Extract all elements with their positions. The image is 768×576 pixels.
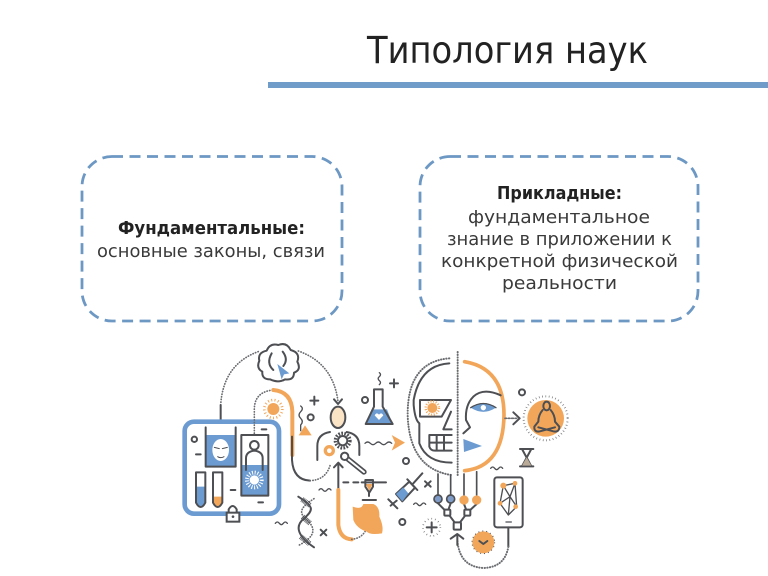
panel: fundamental sciences <box>82 156 342 321</box>
icon: half face <box>463 362 504 471</box>
icon: small marks <box>192 429 266 502</box>
panel text: applied: знание в приложении к <box>447 229 672 250</box>
icon: orange clock <box>472 531 495 554</box>
panel: applied sciences <box>420 156 698 321</box>
panel text: applied: реальности <box>502 273 617 294</box>
icon: squiggle, circle, plus and triangle <box>299 397 318 435</box>
title: Типология наук <box>366 29 648 72</box>
icon: person with gears and wrench <box>317 407 364 472</box>
icon: small waves and cross <box>275 489 331 535</box>
divider: centre dotted line <box>455 352 461 477</box>
icon: brain with cursor <box>258 344 299 381</box>
icon: DNA helix <box>298 497 314 547</box>
panel text: applied <box>441 207 678 294</box>
icon: padlock <box>227 506 239 522</box>
arrow: dotted arc from tank to brain to head <box>221 351 342 430</box>
icon: syringe <box>388 473 422 508</box>
illustration: science icons <box>185 344 568 568</box>
icon: sun <box>264 400 282 418</box>
panel text: applied: конкретной физической <box>441 251 678 272</box>
icon: beaker with face <box>206 427 236 467</box>
icon: phone with neural mesh <box>494 477 523 527</box>
icon: person in scanner tank <box>241 435 268 496</box>
arrow: orange tube from tank to head <box>254 390 331 481</box>
arrow: dashed to meditation <box>505 412 520 424</box>
panel heading: applied: Прикладные: <box>497 184 622 204</box>
panel text: fundamental: основные законы, связи <box>97 242 325 262</box>
icon: network tree <box>434 472 481 530</box>
icon: flask with heart <box>362 373 398 424</box>
icon: meditating figure <box>524 396 568 440</box>
arrow: from heart up to person <box>334 463 367 539</box>
icon: 3D printer nozzle <box>343 480 386 500</box>
icon: test tubes <box>196 472 222 507</box>
icon: orange heart <box>353 504 383 534</box>
icon: hourglass <box>520 449 533 466</box>
arrow: wavy orange to skull <box>365 435 405 451</box>
heading rule <box>268 82 768 88</box>
panel text: applied: фундаментальное <box>468 207 650 228</box>
icon: marks and sparkle <box>399 389 525 536</box>
panel heading: fundamental: Фундаментальные: <box>118 219 305 239</box>
icon: half skull <box>408 358 452 475</box>
arrow: from phone to tree <box>451 527 508 568</box>
panel: laboratory frame <box>185 422 279 514</box>
